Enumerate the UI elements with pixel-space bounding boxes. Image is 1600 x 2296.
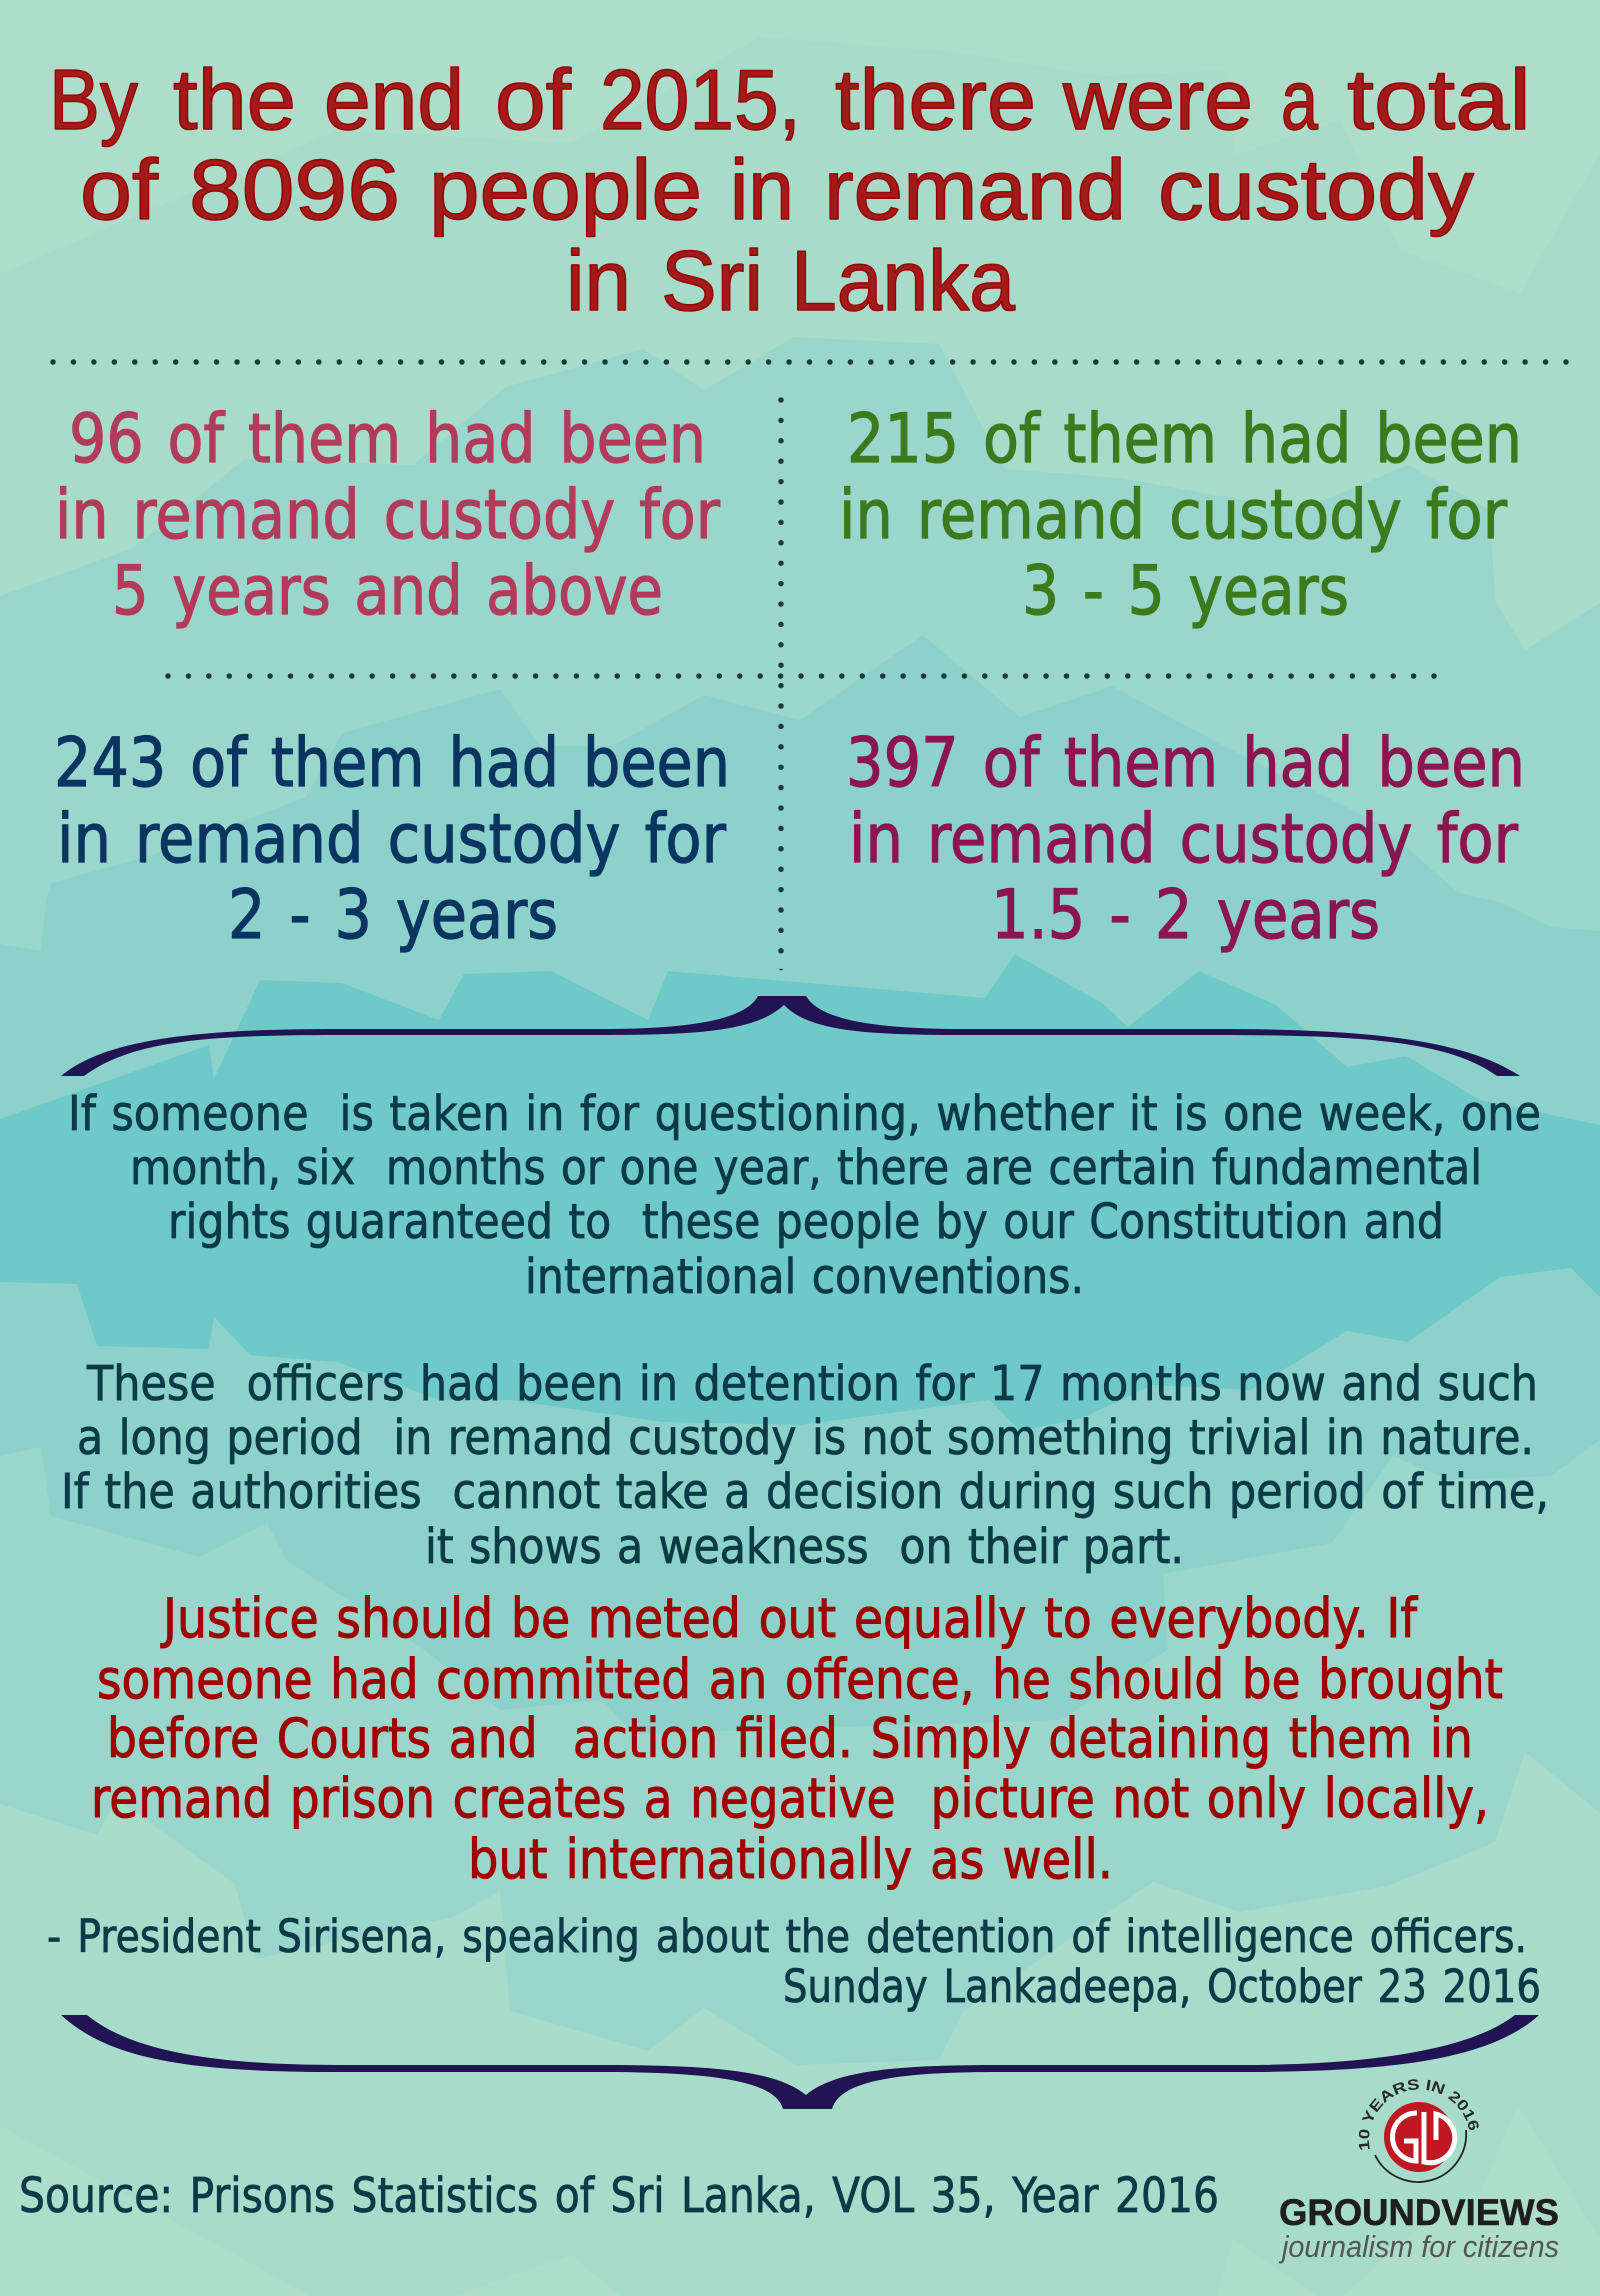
title: By bbox=[49, 53, 138, 148]
body paragraph 2: it shows a weakness on their part. bbox=[425, 1519, 1184, 1575]
stat: 1.5 - 2 years: in remand custody for bbox=[849, 800, 1518, 879]
quote: Justice should be meted out equally to everybody. If bbox=[160, 1587, 1419, 1650]
title: end bbox=[324, 53, 464, 148]
dotted dividers bbox=[53, 362, 1567, 970]
bottom brace bbox=[61, 2015, 1539, 2109]
source: Source: Prisons Statistics of Sri Lanka, VOL 35, Year 2016 bbox=[19, 2168, 1219, 2224]
title: there bbox=[835, 53, 1036, 148]
stat: 2 - 3 years: 243 of them had been bbox=[54, 724, 730, 803]
title: of bbox=[495, 53, 571, 148]
title: Lanka bbox=[791, 234, 1016, 329]
logo: Groundviews bbox=[1278, 2079, 1559, 2264]
stat: 5 years and above: 96 of them had been bbox=[69, 400, 706, 479]
title: in bbox=[730, 143, 794, 238]
title: custody bbox=[1158, 143, 1475, 238]
quote bbox=[91, 1587, 1503, 1891]
top brace bbox=[61, 996, 1520, 1076]
stat: 1.5 - 2 years bbox=[846, 724, 1525, 955]
title: total bbox=[1347, 53, 1531, 148]
stat: 2 - 3 years: 2 - 3 years bbox=[228, 876, 558, 955]
stat: 5 years and above: 5 years and above bbox=[112, 552, 663, 631]
title: Sri bbox=[661, 234, 763, 329]
title: a bbox=[1281, 53, 1319, 148]
stat: 5 years and above: in remand custody for bbox=[55, 476, 720, 555]
title: people bbox=[429, 143, 702, 238]
stat: 3 - 5 years bbox=[839, 400, 1522, 631]
body paragraph 2 bbox=[61, 1356, 1549, 1575]
logo tagline: journalism for citizens bbox=[1278, 2229, 1559, 2264]
title: 2015, bbox=[600, 53, 801, 148]
quote: but internationally as well. bbox=[468, 1828, 1113, 1891]
stat: 3 - 5 years: in remand custody for bbox=[839, 476, 1507, 555]
title: the bbox=[173, 53, 296, 148]
stat: 5 years and above bbox=[55, 400, 720, 631]
stat: 2 - 3 years bbox=[54, 724, 730, 955]
logo emblem: 10 YEARS IN 2016 bbox=[1358, 2079, 1479, 2150]
title bbox=[49, 53, 1531, 329]
stat: 3 - 5 years: 3 - 5 years bbox=[1022, 552, 1349, 631]
body paragraph 1: international conventions. bbox=[525, 1249, 1084, 1305]
body paragraph 1 bbox=[68, 1086, 1541, 1305]
body paragraph 1: rights guaranteed to these people by our Constitution and bbox=[168, 1194, 1444, 1250]
stat: 2 - 3 years: in remand custody for bbox=[57, 800, 726, 879]
title: 8096 bbox=[189, 143, 400, 238]
stat: 1.5 - 2 years: 1.5 - 2 years bbox=[991, 876, 1380, 955]
title: were bbox=[1062, 53, 1253, 148]
logo wordmark: GROUNDVIEWS bbox=[1279, 2192, 1559, 2233]
title: remand bbox=[824, 143, 1126, 238]
title: of bbox=[80, 143, 158, 238]
attribution bbox=[47, 1910, 1541, 2013]
title: in bbox=[566, 234, 631, 329]
logo emblem bbox=[1358, 2079, 1479, 2183]
